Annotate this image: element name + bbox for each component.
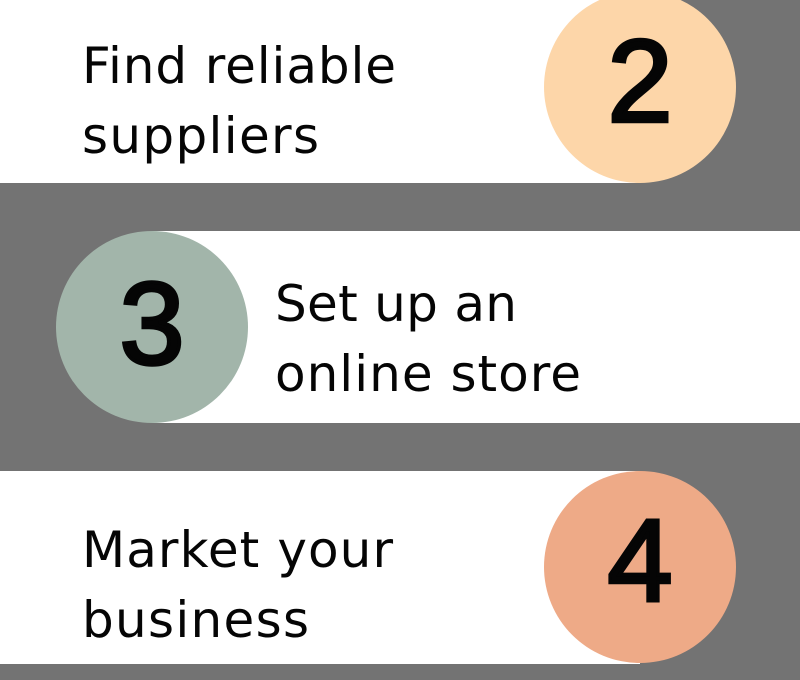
text: set up an online store	[275, 275, 581, 403]
panel: step 2	[0, 0, 736, 183]
text: find reliable suppliers: suppliers	[82, 107, 319, 165]
badge: number 4	[544, 471, 736, 663]
text: find reliable suppliers: Find reliable	[82, 37, 396, 95]
white band: step 3	[152, 231, 800, 423]
badge: number 2	[544, 0, 736, 183]
text: set up an online store: Set up an	[275, 275, 517, 333]
white band: step 2	[0, 0, 640, 183]
panel: step 4	[0, 471, 736, 664]
text: market your business: Market your	[82, 521, 393, 579]
text: market your business	[82, 521, 393, 649]
badge: number 3: 3	[119, 258, 185, 389]
text: market your business: business	[82, 591, 309, 649]
text: set up an online store: online store	[275, 345, 581, 403]
white band: step 4	[0, 471, 640, 664]
text: find reliable suppliers	[82, 37, 396, 165]
panel: step 3	[56, 231, 800, 423]
badge: number 2: 2	[607, 16, 673, 146]
badge: number 4: 4	[607, 494, 673, 626]
badge: number 3	[56, 231, 248, 423]
